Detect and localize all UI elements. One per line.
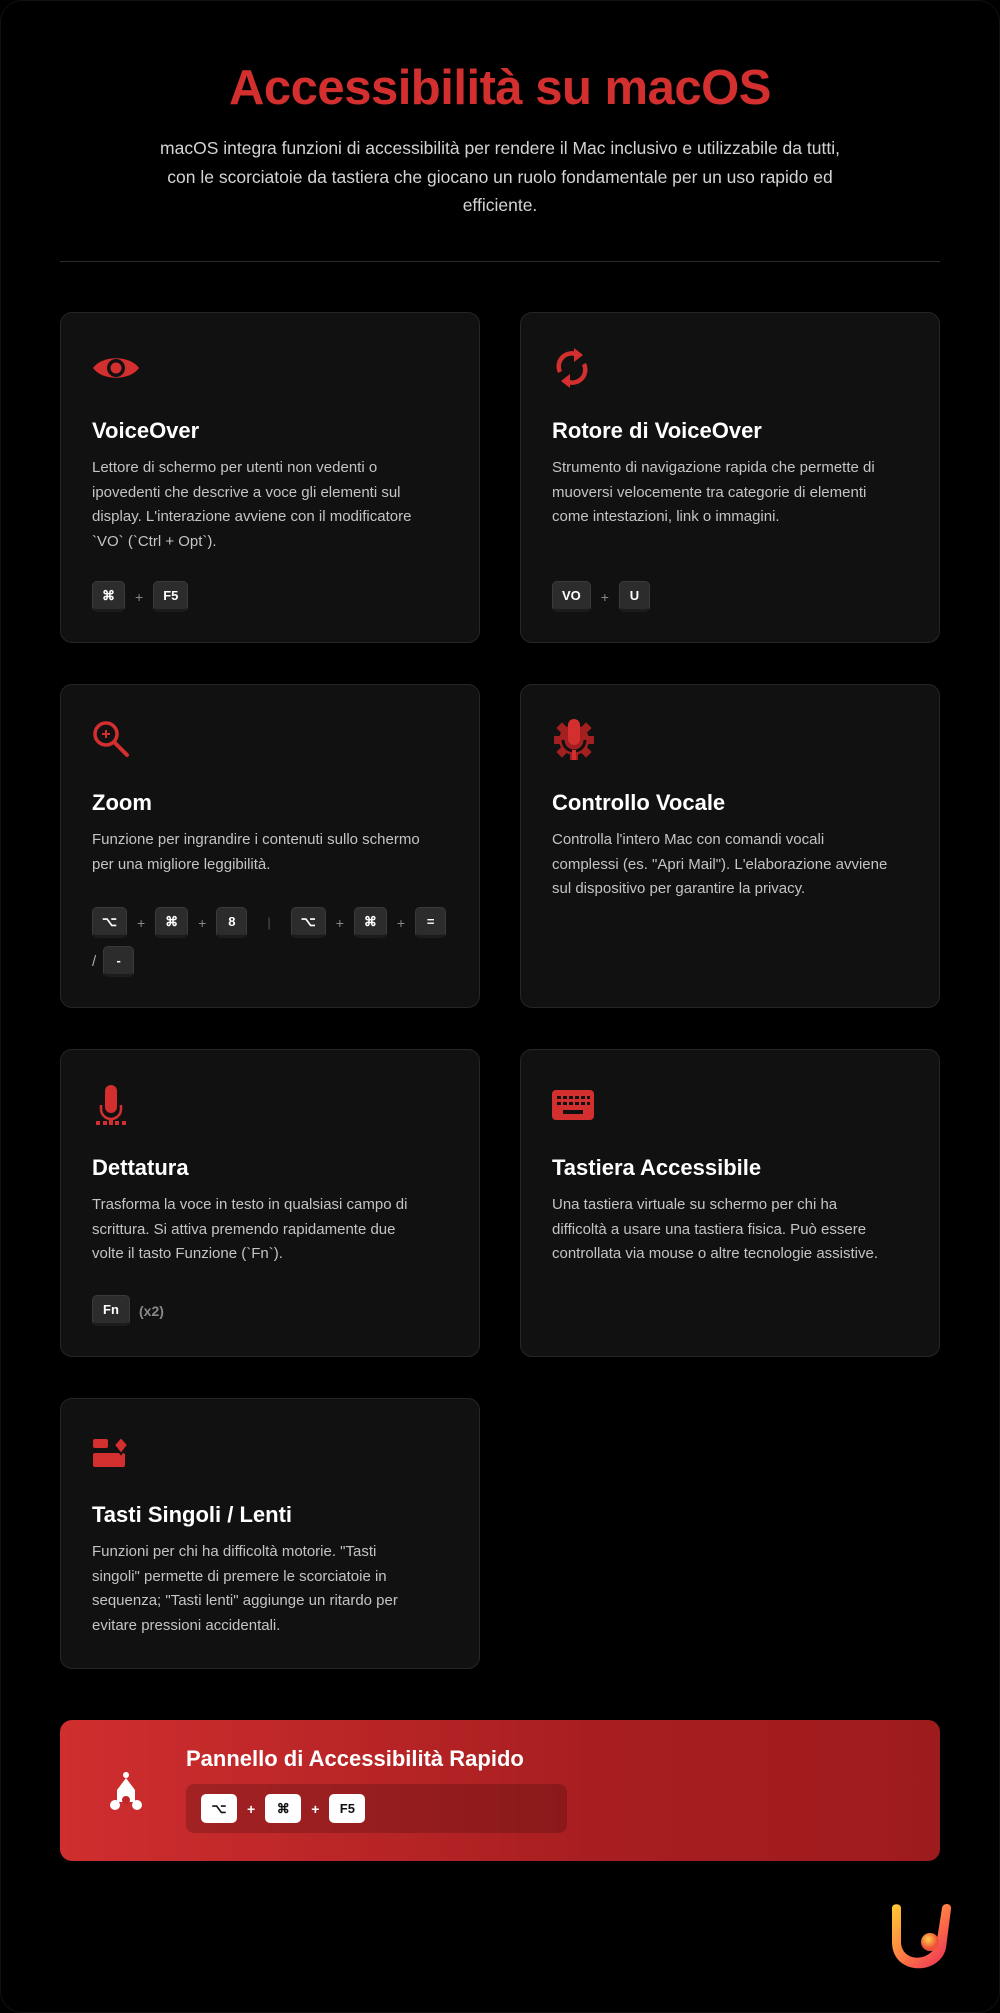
icon: mic gear (554, 719, 594, 760)
text (552, 831, 887, 897)
title: Accessibilità su macOS (229, 61, 771, 115)
text: complessi (es. "Apri Mail"). L'elaborazione avviene (552, 856, 887, 872)
shortcut: 8 (228, 914, 235, 929)
text: Controlla l'intero Mac con comandi vocali (552, 831, 824, 848)
panel: Rotore di VoiceOver (520, 312, 940, 643)
panel: Tasti Singoli / Lenti (60, 1398, 480, 1669)
banner shortcut (186, 1784, 567, 1833)
shortcut: F5 (163, 588, 178, 603)
icon: logo (892, 1904, 952, 1968)
text: sequenza; "Tasti lenti" aggiunge un ritardo per (92, 1592, 398, 1609)
text: display. L'interazione avviene con il modificatore (92, 508, 411, 525)
icon: microphone (96, 1085, 126, 1125)
shortcut: + (601, 588, 609, 604)
panel: Zoom (60, 684, 480, 1008)
text: `VO` (`Ctrl + Opt`). (92, 532, 217, 550)
text: Strumento di navigazione rapida che permette di (552, 459, 875, 476)
icon: rotate (556, 348, 588, 388)
banner shortcut: + (247, 1800, 255, 1816)
heading: Tasti Singoli / Lenti (92, 1502, 292, 1527)
text: Una tastiera virtuale su schermo per chi ha (552, 1196, 837, 1213)
text: controllata via mouse o altre tecnologie assistive. (552, 1245, 878, 1262)
text (92, 1196, 407, 1262)
text: sul dispositivo per garantire la privacy. (552, 880, 805, 897)
shortcut (552, 581, 650, 612)
text: Funzione per ingrandire i contenuti sullo schermo (92, 831, 420, 848)
subtitle: con le scorciatoie da tastiera che giocano un ruolo fondamentale per un uso rapido ed (167, 166, 833, 186)
callout: quick panel banner (60, 1720, 940, 1861)
heading: VoiceOver (92, 418, 199, 443)
text (92, 831, 420, 872)
icon: keys (93, 1438, 127, 1467)
shortcut: (x2) (139, 1302, 164, 1318)
heading: Rotore di VoiceOver (552, 418, 762, 443)
text: singoli" permette di premere le scorciatoie in (92, 1568, 387, 1584)
panel: Tastiera Accessibile (520, 1049, 940, 1357)
text: difficoltà a usare una tastiera fisica. Può essere (552, 1220, 866, 1238)
icon: accessibility (110, 1772, 142, 1810)
shortcut: ⌘ (165, 914, 178, 928)
icon: eye (93, 358, 139, 378)
shortcut: VO (562, 588, 581, 603)
text: scrittura. Si attiva premendo rapidamente due (92, 1220, 396, 1238)
text: Trasforma la voce in testo in qualsiasi campo di (92, 1196, 407, 1213)
text (92, 459, 411, 550)
shortcut: + (135, 588, 143, 604)
banner shortcut: ⌘ (277, 1800, 290, 1816)
text: volte il tasto Funzione (`Fn`). (92, 1245, 283, 1262)
shortcut: Fn (103, 1302, 119, 1317)
text (552, 1196, 878, 1262)
banner shortcut: ⌥ (212, 1800, 226, 1816)
shortcut: | (267, 915, 271, 930)
shortcut: ⌘ (102, 588, 115, 602)
text: come intestazioni, link o immagini. (552, 508, 780, 525)
shortcut: ⌘ (364, 914, 377, 928)
banner shortcut: F5 (340, 1801, 355, 1816)
shortcut: - (116, 953, 121, 968)
shortcut (92, 1295, 164, 1326)
shortcut: ⌥ (301, 914, 316, 928)
shortcut (92, 907, 446, 977)
shortcut: + (397, 914, 405, 930)
icon: keyboard (552, 1090, 594, 1120)
shortcut: ⌥ (102, 914, 117, 928)
text: per una migliore leggibilità. (92, 856, 270, 872)
shortcut: / (92, 953, 96, 970)
text (92, 1543, 398, 1634)
icon: magnifier (93, 721, 130, 758)
shortcut (92, 581, 188, 612)
panel: Dettatura (60, 1049, 480, 1357)
subtitle: macOS integra funzioni di accessibilità per rendere il Mac inclusivo e utilizzabile da tutti, (160, 138, 840, 158)
text: Funzioni per chi ha difficoltà motorie. "Tasti (92, 1543, 376, 1560)
shortcut: + (336, 914, 344, 930)
heading: Zoom (92, 790, 152, 815)
heading: Controllo Vocale (552, 790, 725, 815)
heading: Dettatura (92, 1155, 189, 1180)
shortcut: + (137, 914, 145, 930)
shortcut: + (198, 914, 206, 930)
heading: Tastiera Accessibile (552, 1155, 761, 1180)
text: muoversi velocemente tra categorie di elementi (552, 484, 866, 500)
banner shortcut: + (311, 1800, 319, 1816)
subtitle: efficiente. (463, 195, 537, 215)
shortcut: = (427, 914, 434, 929)
text (552, 459, 875, 525)
banner title: Pannello di Accessibilità Rapido (186, 1746, 524, 1771)
subtitle (160, 138, 840, 215)
text: evitare pressioni accidentali. (92, 1616, 280, 1634)
shortcut: U (630, 588, 639, 603)
panel: Controllo Vocale (520, 684, 940, 1008)
text: Lettore di schermo per utenti non vedenti o (92, 459, 377, 476)
panel: VoiceOver (60, 312, 480, 643)
text: ipovedenti che descrive a voce gli elementi sul (92, 484, 401, 500)
